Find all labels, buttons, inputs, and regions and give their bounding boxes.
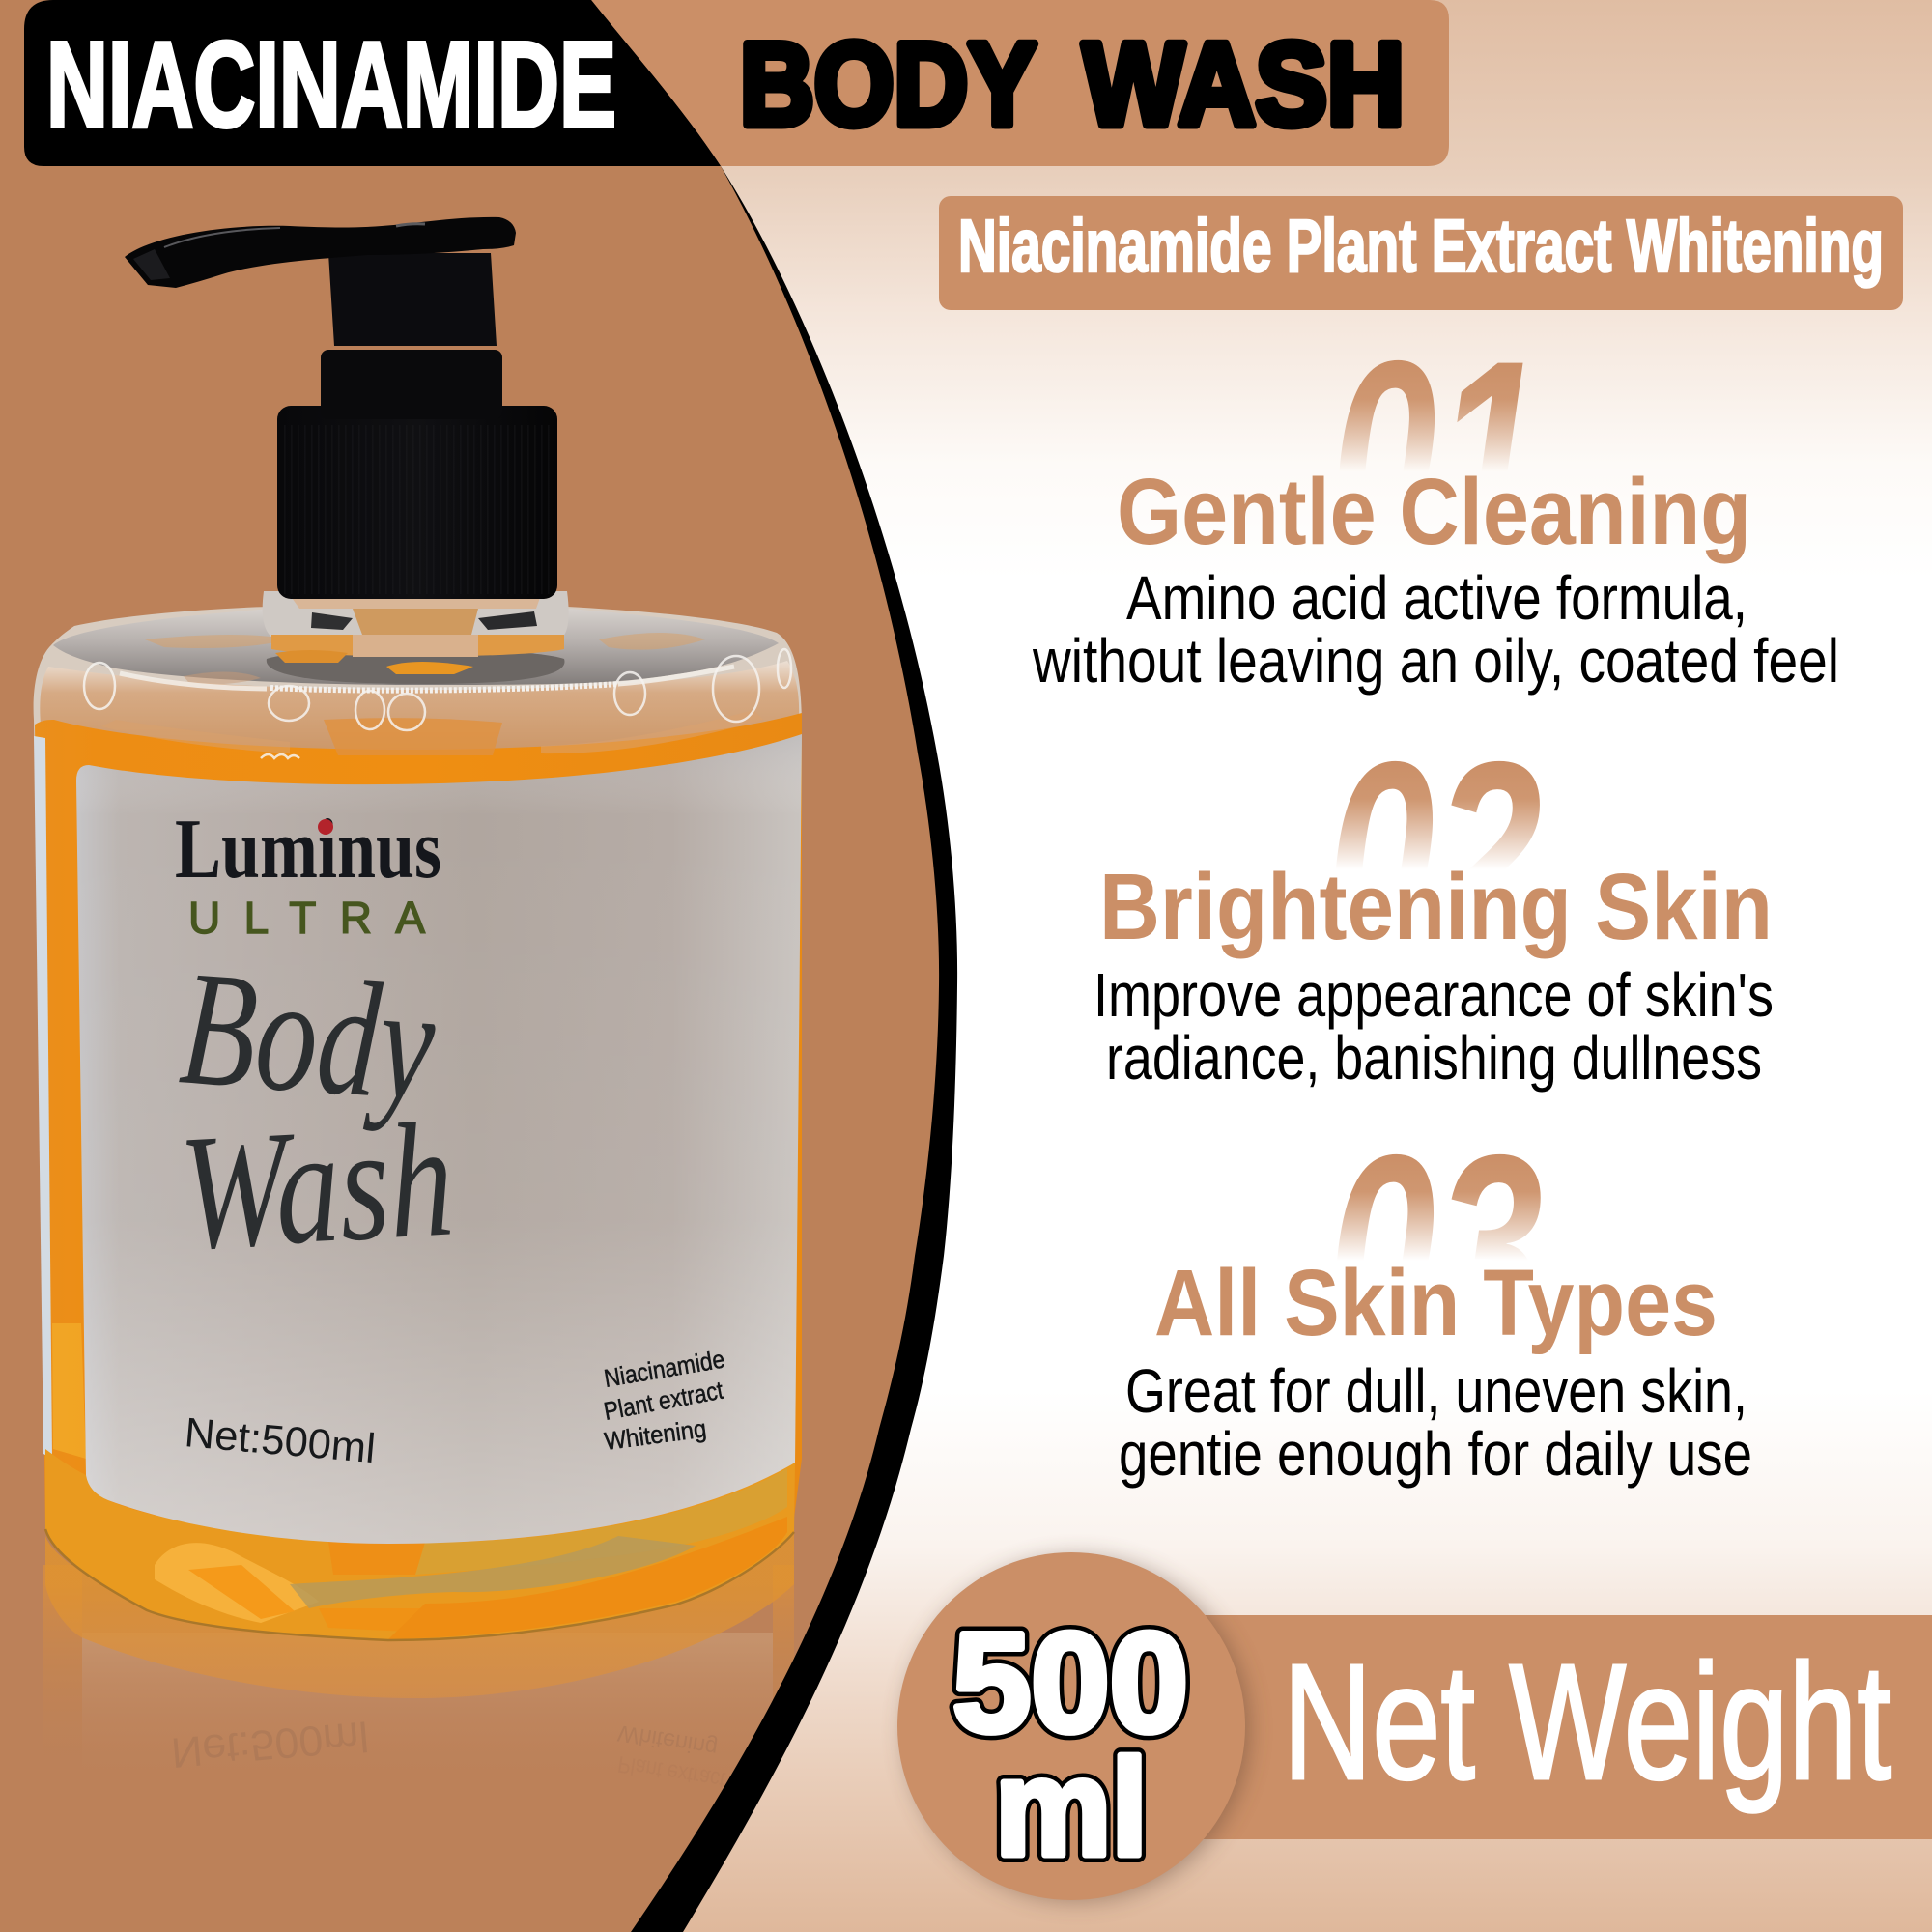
- 500 ml badge: ml: [995, 1731, 1148, 1885]
- grey disc on top: [53, 609, 779, 685]
- bottle reflection: [43, 1534, 794, 1768]
- bottle reflection: Net:500ml: [169, 1712, 371, 1776]
- ingredient note: Whitening: [603, 1413, 708, 1456]
- badge value: 500: [952, 1604, 1188, 1761]
- side highlight: [34, 736, 52, 1459]
- glass shoulder: [34, 607, 802, 773]
- ingredient note: [602, 1345, 726, 1456]
- heading: body wash: BODY: [740, 18, 1037, 150]
- description 03: Great for dull, uneven skin,: [1125, 1356, 1747, 1426]
- rim highlight: [270, 684, 618, 691]
- pump spout: [125, 217, 516, 288]
- product script: body: Body: [175, 936, 440, 1135]
- 500 ml badge: 500: [952, 1604, 1188, 1761]
- product bottle: [34, 217, 802, 1793]
- number 01: 01: [1331, 306, 1542, 596]
- heading: gentle cleaning: Gentle Cleaning: [1117, 459, 1751, 564]
- description 01: Amino acid active formula,: [1126, 563, 1747, 633]
- description 02: Improve appearance of skin's: [1094, 960, 1774, 1030]
- base of bottle: [45, 1449, 795, 1640]
- net weight band: [1159, 1615, 1932, 1839]
- ingredient note: Plant extract: [602, 1376, 726, 1426]
- subtitle pill: [939, 196, 1903, 310]
- header bar: body wash: [541, 0, 1449, 166]
- liquid: [35, 713, 802, 1640]
- benefit 02: radiance, banishing dullness: [1106, 1023, 1762, 1093]
- clear band over liquid: [40, 661, 799, 753]
- heading: body wash: WASH: [1083, 18, 1405, 150]
- number 03: 03: [1328, 1100, 1543, 1390]
- bottle reflection: Whitening: [616, 1719, 720, 1761]
- ingredient note: Niacinamide: [602, 1345, 726, 1393]
- pump cap: [277, 406, 557, 599]
- heading: body wash: [740, 18, 1405, 150]
- net volume on label: Net:500ml: [183, 1409, 378, 1472]
- product script: wash: Wash: [176, 1088, 458, 1284]
- 500 ml badge: [897, 1552, 1249, 1901]
- benefit 03: [1119, 1100, 1752, 1489]
- brand name: Luminus: [175, 803, 441, 896]
- heading: brightening skin: Brightening Skin: [1099, 854, 1773, 959]
- bottle label: [76, 734, 802, 1544]
- curved black divider: [0, 0, 957, 1932]
- benefit 03: gentie enough for daily use: [1119, 1419, 1752, 1489]
- left product panel: [0, 0, 939, 1932]
- bubbles: [84, 649, 791, 758]
- benefit 02: [1094, 707, 1774, 1093]
- bottle reflection: Plant extract: [616, 1750, 727, 1793]
- benefit 01: [1032, 306, 1839, 696]
- header bar: niacinamide: [24, 0, 721, 166]
- badge unit: ml: [995, 1731, 1148, 1885]
- heading: niacinamide: NIACINAMIDE: [46, 16, 616, 153]
- brand sub-name: ULTRA: [188, 893, 425, 943]
- bottle neck: [263, 591, 569, 684]
- pump collar: [321, 350, 502, 419]
- number 02: 02: [1327, 707, 1542, 997]
- pump stem: [328, 253, 497, 346]
- heading: all skin types: All Skin Types: [1154, 1250, 1718, 1355]
